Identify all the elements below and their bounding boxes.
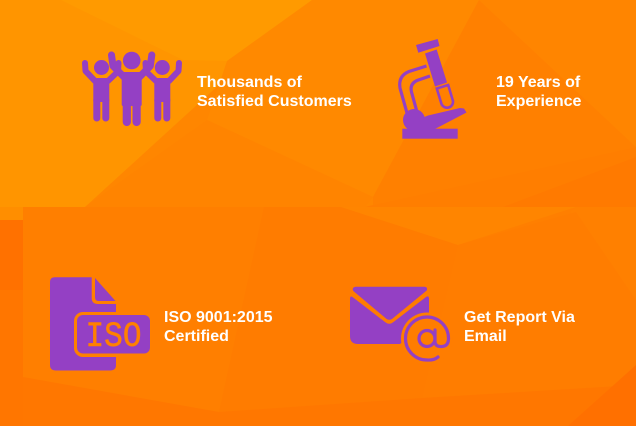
text: 19 years of experience: 19 Years of — [496, 74, 580, 91]
text: thousands of satisfied customers — [197, 74, 352, 110]
text: thousands of satisfied customers: Thousands of — [197, 74, 302, 91]
text: ISO 9001:2015 certified — [164, 309, 273, 345]
text: get report via email: Email — [464, 328, 507, 345]
icon: ISO document: ISO — [86, 317, 142, 357]
text: ISO 9001:2015 certified: ISO 9001:2015 — [164, 309, 273, 326]
text: 19 years of experience — [496, 74, 581, 110]
text: thousands of satisfied customers: Satisfied Customers — [197, 93, 352, 110]
text: get report via email: Get Report Via — [464, 309, 575, 326]
text: 19 years of experience: Experience — [496, 93, 581, 110]
text: get report via email — [464, 309, 575, 345]
text: ISO 9001:2015 certified: Certified — [164, 328, 229, 345]
